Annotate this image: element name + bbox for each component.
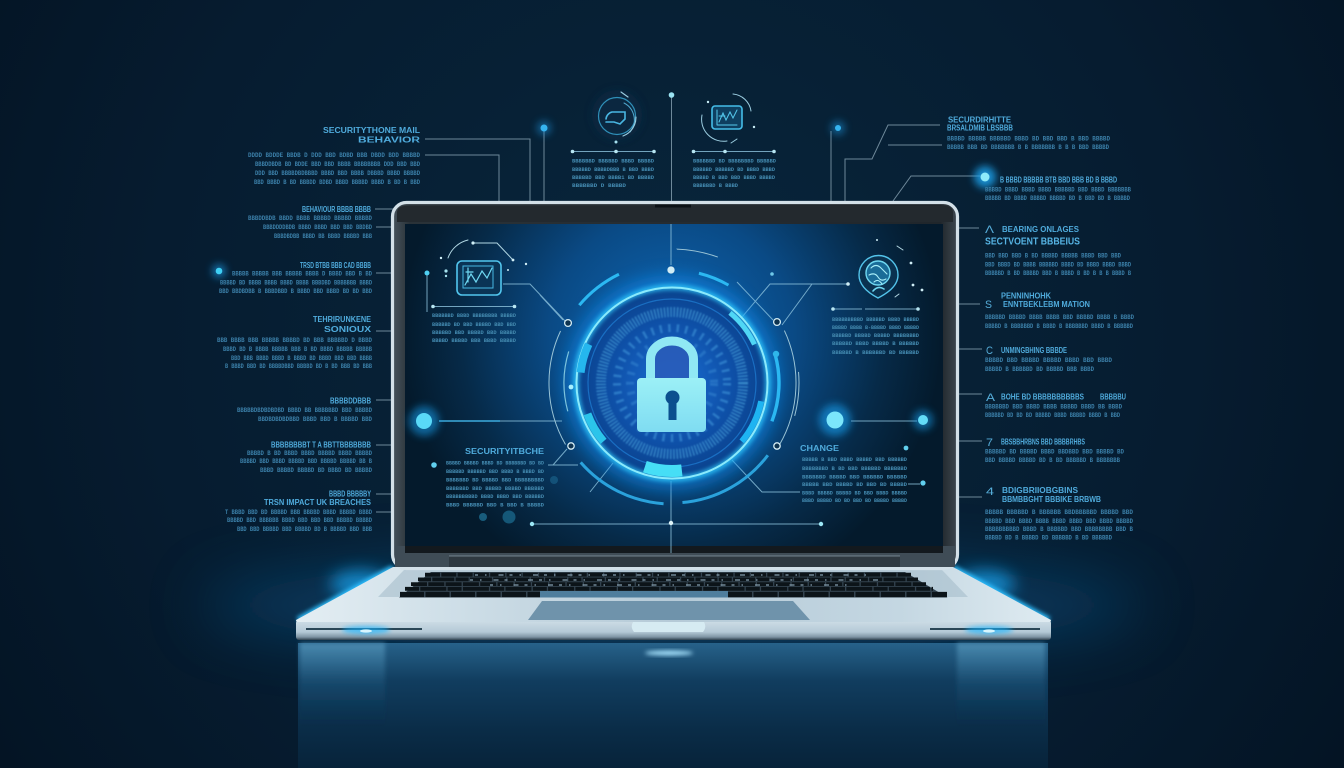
text block: change heading: BBBD BBBBD BBBBD BD BBD BBBD BBBBD <box>802 490 907 496</box>
text block: security heading: BBBBBD BBBBBD BBD BBBD B BBBD BD <box>446 468 544 475</box>
text block: left 4: BBBD BD B BBBB BBBBB BBB B BD BBBD BBBBB BBBBB <box>223 346 372 353</box>
text block: change heading <box>800 444 908 504</box>
text block: left 6 <box>240 440 372 474</box>
node: top centre dot <box>669 92 674 98</box>
text block: left 4 <box>217 315 372 370</box>
text block: left 1: BEHAVIOR <box>358 136 420 144</box>
icon: top badge <box>592 90 642 144</box>
text block: left 5: BBDBDBDBDBBD BBBD BBD B BBBBD BBD <box>258 416 372 423</box>
text block: left 5: BBBBBDBDBDBDBD BBBD BB BBBBBBD BBD BBBBD <box>237 407 372 414</box>
text block: left 4: SONIOUX <box>324 325 372 334</box>
text block: right 1: BBBBB BBB BD BBBBBBB B B BBBBBBB B B B BBD BBBBD <box>947 144 1109 151</box>
front notch <box>632 622 705 632</box>
node: right top glow dot <box>831 121 845 135</box>
text block: left 3: BBBBB BBBBB BBB BBBBB BBBB D BBBD BBD B BD <box>232 270 372 278</box>
text block: right 1: BBBBD BBBBB BBBBBD BBBD BD BBD BBD B BBD BBBBD <box>947 136 1110 142</box>
text block: security heading <box>446 447 545 508</box>
connector ring nodes <box>565 267 780 525</box>
text block: right 6: BOHE BD BBBBBBBBBBS <box>1001 392 1085 402</box>
node: right small glow <box>913 410 933 430</box>
text block: security heading: BBBBBBD BD BBBBD BBD BBBBBBBBD <box>446 476 544 484</box>
text block: right 7: BBD BBBBD BBBBD BD B BD BBBBBD B BBBBBBB <box>985 457 1120 464</box>
text block: screen right caption: BBBBBD BBBD BBBBD B BBBBBD <box>832 340 919 347</box>
text block: right 8: BBBBB BBBBBD B BBBBBB BBDBBBBBD BBBBD BBD <box>985 509 1133 516</box>
screen scattered dots <box>431 446 926 526</box>
text block: screen left caption: BBBBBBD BBBD BBBBBBBB BBBBD <box>432 312 516 319</box>
text block: left 2: BBBDDDDBDB BBBD BBBD BBD BBD BBDBD <box>263 224 372 231</box>
text block: screen left caption <box>424 270 516 344</box>
text block: left 1: BBBDDBDB BD BDDE BBD BBD BBBB BBBBBBBB DDD BBD BBD <box>255 161 420 168</box>
text block: right 8: BBMBBGHT BBBIKE BRBWB <box>1002 495 1101 504</box>
text block: left 2 <box>248 205 372 240</box>
text block: left 6: BBBBBBBBT T A BBTTBBBBBBB <box>271 440 371 450</box>
text block: right 5: UNMINGBHING BBBDE <box>1001 346 1067 355</box>
icon: padlock <box>637 340 706 432</box>
text block: left 3 <box>219 261 372 295</box>
text block: left 4: BBD BBB BBBD BBBD B BBBD BD BBBD BBD BBD BBBB <box>231 355 372 362</box>
text block: right 1 <box>947 116 1110 151</box>
text block: top left caption: BBBBBBD D BBBBD <box>572 182 627 189</box>
text block: right 4: BBBBBD BBBBD BBBB BBBB BBD BBBBD BBBB B BBBD <box>985 314 1134 321</box>
text block: right 3: BEARING ONLAGES <box>1002 225 1080 234</box>
text block: security heading: SECURITYITBCHE <box>465 447 545 456</box>
connector lines above and beside the laptop <box>375 97 982 512</box>
text block: screen left caption: BBBBBD BBD BBBBD BBD BBBBD <box>432 329 516 336</box>
text block: right 2: BBBBB BD BBBD BBBBD BBBBD BD B BBD BD B BBBBD <box>985 195 1130 202</box>
text block: right 4 <box>985 292 1134 330</box>
ring arcs <box>502 213 842 553</box>
text block: right 7: 7 <box>986 437 993 449</box>
text block: right 8: BBBBD BBD BBBD BBBB BBBD BBBD BBD BBBD BBBBD <box>985 518 1133 525</box>
text block: right 6: A <box>986 392 996 404</box>
text block: left 7: BBD BBD BBBBD BBD BBBBD BD B BBBBD BBD BBB <box>237 526 372 533</box>
text block: security heading: BBBBBBBBBD BBBD BBBD BBD BBBBBD <box>446 493 544 500</box>
icon: brain badge <box>846 239 923 298</box>
text block: right 6 <box>985 392 1126 419</box>
text block: change heading: CHANGE <box>800 444 840 453</box>
icon: screen chart panel <box>440 240 527 295</box>
text block: right 3: BBD BBD BBD B BD BBBBD BBBBB BBBD BBD BBD <box>985 252 1121 260</box>
text block: screen right caption: BBBBD BBBB B-BBBBD BBBD BBBBD <box>832 324 919 331</box>
text block: right 8: BBBBD BD B BBBBD BD BBBBBD B BD BBBBBD <box>985 534 1112 542</box>
text block: right 2: B BBBD BBBBB BTB BBD BBB BD B BBBD <box>1000 176 1117 184</box>
text block: left 4: TEHRIRUNKENE <box>313 315 372 324</box>
text block: left 5 <box>237 396 372 423</box>
text block: change heading: BBBBBBD BBBBD BBD BBBBBD BBBBBD <box>802 474 908 480</box>
text block: change heading: BBBBB BBD BBBBD BD BBD BD BBBBD <box>802 481 908 488</box>
text block: top right caption: BBBBBD BBBBBD BD BBBD BBBD <box>693 166 775 173</box>
text block: right 2: BBBBD BBBD BBBD BBBD BBBBBD BBD BBBD BBBBBBB <box>985 186 1131 194</box>
text block: right 6: BBBBBBD BBD BBBD BBBB BBBBD BBBD BB BBBD <box>985 404 1122 410</box>
text block: left 1: DDD BBD BBBBDBDBBBD BBBD BBD BBBB DBBBD BBBD BBBBD <box>255 170 420 177</box>
text block: right 3: Λ <box>985 224 995 236</box>
trackpad <box>528 601 810 620</box>
text block: right 6: BBBBBD BD BD BD BBBBD BBBD BBBBD BBBD B BBD <box>985 412 1120 419</box>
laptop lid and bezel <box>392 202 958 568</box>
text block: security heading: BBBBBBD BBD BBBBD BBBBD BBBBBD <box>446 485 544 492</box>
text block: right 7: BBSBBHRBNS BBD BBBBRHBS <box>1001 438 1085 446</box>
text block: right 5 <box>985 345 1112 373</box>
text block: top right caption: BBBBBBD BD BBBBBBBD BBBBBD <box>693 158 776 164</box>
text block: top right caption: BBBBBBD B BBBD <box>693 182 738 189</box>
text block: left 2: BBBDBDBB BBBD BB BBBD BBBBD BBB <box>274 233 372 240</box>
text block: change heading: BBBBB B BBD BBBD BBBBD BBD BBBBBD <box>802 456 907 463</box>
text block: right 5: BBBBD B BBBBBD BD BBBBD BBB BBBD <box>985 366 1094 373</box>
text block: top right caption <box>692 150 776 189</box>
screen connector lines <box>439 224 920 553</box>
text block: change heading: BBBD BBBBD BD BD BBD BD BBBBD BBBBD <box>802 497 907 504</box>
text block: left 7: BBBD BBBBBY <box>329 490 371 498</box>
text block: right 4: PENNINHOHK <box>1001 292 1051 300</box>
text block: left 7: TRSN IMPACT UK BREACHES <box>264 498 372 507</box>
text block: top right caption: BBBBD B BBD BBD BBBD BBBBD <box>693 174 775 181</box>
text block: top left caption: BBBBBBD BBBBBD BBBD BBBBD <box>572 158 654 164</box>
text block: left 4: B BBBD BBD BD BBBBDBBD BBBBD BD B BD BBB BD BBB <box>225 363 372 370</box>
text block: screen right caption: BBBBBD BBBBD BBBBD BBBBBBBD <box>832 332 919 339</box>
text block: right 8 <box>985 486 1133 542</box>
screen <box>405 213 943 553</box>
text block: right 2 <box>985 176 1131 202</box>
node: right big glow <box>819 404 851 436</box>
text block: change heading: BBBBBBBD B BD BBD BBBBBD BBBBBBD <box>802 465 907 472</box>
text block: right 8: 4 <box>986 486 994 498</box>
keyboard <box>399 572 948 598</box>
text block: right 8: BBBBBBBBBD BBBD B BBBBBD BBD BBBBBBBB BBD B <box>985 526 1133 533</box>
text block: left 6: BBBBD B BD BBBD BBBD BBBBD BBBD BBBBD <box>247 450 372 457</box>
text block: left 3: BBBBD BD BBBB BBBB BBBD BBBB BBBDBD BBBBBBB BBBD <box>220 280 372 286</box>
text block: right 1: SECURDIRHITTE <box>948 116 1012 124</box>
text block: right 7: BBBBBD BD BBBBD BBBD BBDBBD BBD BBBBD BD <box>985 448 1124 456</box>
text block: top left caption <box>571 150 656 189</box>
text block: left 3: BBD BBDBDBB B BBBDBBD B BBBD BBD BBBD BD BD BBD <box>219 288 372 295</box>
text block: left 7 <box>225 490 372 533</box>
text block: screen left caption: BBBBBD BD BBD BBBBD BBD BBD <box>432 321 516 328</box>
data rings <box>601 312 743 454</box>
text block: left 4: BBB BBBB BBB BBBBB BBBBD BD BBB BBBBBD D BBBD <box>217 337 372 344</box>
text block: screen left caption: BBBBD BBBBD BBB BBBD BBBBD <box>432 337 516 344</box>
node: left glow dot <box>212 264 226 278</box>
text block: right 5: BBBBD BBD BBBBD BBBBD BBBD BBD BBBD <box>985 357 1112 364</box>
node: left big glow <box>409 406 439 436</box>
text block: right 4: BBBBD B BBBBBBD B BBBD B BBBBBBD BBBD B BBBBBD <box>985 323 1133 330</box>
text block: right 3 <box>985 224 1131 277</box>
node: left top glow dot <box>537 121 551 135</box>
text block: security heading: BBBD BBBBBD BBD B BBD B BBBBD <box>446 502 544 508</box>
text block: left 1 <box>248 126 420 186</box>
text block: screen right caption <box>831 307 920 356</box>
central lock dial <box>502 213 842 553</box>
text block: top left caption: BBBBBD BBBBDBBB B BBD BBBD <box>572 166 654 173</box>
laptop reflection <box>298 643 1048 768</box>
text block: left 2: BEHAVIOUR BBBB BBBB <box>302 205 371 214</box>
text block: right 3: SECTVOENT BBBEIUS <box>985 236 1080 248</box>
text block: left 7: BBBBD BBD BBBBBB BBBD BBD BBD BBD BBBBD BBBBD <box>227 517 372 524</box>
text block: right 1: BRSALDMIB LBSBBB <box>947 124 1013 132</box>
text block: right 4: ENNTBEKLEBM MATION <box>1003 300 1090 309</box>
right speaker slot with glow <box>930 626 1040 634</box>
text block: left 1: DDDD BDDDE BBDB D DDD BBD BDBD BBB DBDD BDD BBBBD <box>248 152 420 159</box>
text block: right 3: BBBBBD B BD BBBBD BBD B BBBD B BD B B B BBBD B <box>985 270 1131 277</box>
laptop base <box>296 567 1051 640</box>
text block: left 6: BBBD BBBBD BBBBD BD BBBD BD BBBBD <box>260 467 372 474</box>
left speaker slot with glow <box>306 626 422 634</box>
text block: top left caption: BBBBBD BBD BBBB1 BD BBBBD <box>572 174 654 181</box>
text block: left 6: BBBBD BBD BBBD BBBBD BBD BBBBD BBBBD BB B <box>240 458 372 465</box>
text block: left 2: BBBDDBDB BBDD BBBB BBBBD BBBBD BBBBD <box>248 215 372 222</box>
text block: left 5: BBBBDDBBB <box>330 396 371 406</box>
text block: right 4: S <box>985 299 992 311</box>
text block: left 7: T BBBD BBD BD BBBBD BBB BBBBD BBBD BBBBD BBBD <box>225 509 372 516</box>
text block: screen right caption: BBBBBBBBBD BBBBBD BBBD BBBBD <box>832 316 919 323</box>
text block: right 6: BBBBBU <box>1100 392 1126 402</box>
icon: top screen <box>702 94 755 143</box>
text block: right 7 <box>985 437 1124 464</box>
text block: right 5: C <box>986 345 993 357</box>
text block: left 3: TRSD BTBB BBB CAD BBBB <box>300 261 371 270</box>
text block: right 3: BBD BBBD BD BBBB BBBBBD BBBD BD BBBD BBBD BBBD <box>985 262 1131 268</box>
text block: left 1: SECURITYTHONE MAIL <box>323 126 420 135</box>
node: right bright glow dot <box>974 166 996 188</box>
text block: security heading: BBBBD BBBBD BBBD BD BBBBBBD BD BD <box>446 460 544 466</box>
text block: right 8: BDIGBRIIOBGBINS <box>1002 486 1079 495</box>
text block: left 1: BBD BBBD B BD BBBDD BDBD BBBD BBBBD BBBD B BD B BBD <box>254 179 420 186</box>
text block: screen right caption: BBBBBD B BBBBBBD BD BBBBBD <box>832 349 919 356</box>
